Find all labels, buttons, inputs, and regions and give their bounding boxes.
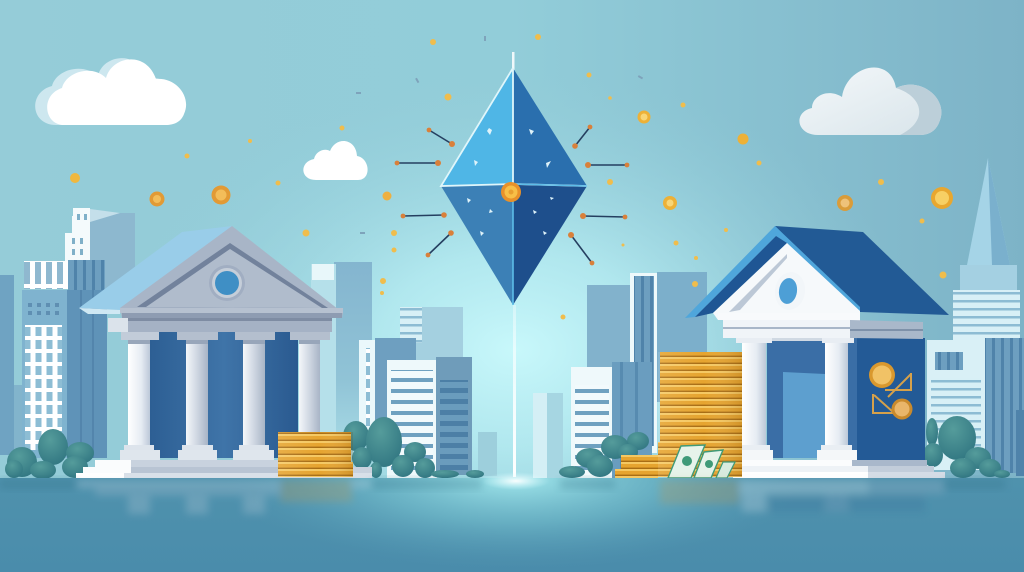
right bank: main roof (685, 226, 949, 318)
right bank: entablature (723, 320, 923, 341)
kite: upper right facet (513, 68, 587, 186)
right bank: columns (735, 338, 857, 460)
left bank: columns (120, 332, 330, 460)
right bank: steps (733, 460, 945, 478)
kite: white edges (441, 68, 587, 186)
light beam (512, 52, 516, 477)
kite: lower right facet (513, 184, 587, 305)
left bank: pediment (120, 226, 343, 318)
left bank: gold coin stack (278, 432, 353, 477)
cloud: top left (35, 58, 186, 125)
right bank: pediment (713, 243, 860, 320)
left bank: steps (76, 460, 372, 478)
right bank: coin exchange icon (869, 362, 912, 420)
kite: center coin (501, 182, 521, 202)
radiating connector lines (395, 125, 629, 265)
buildings: left skyline (0, 208, 135, 458)
right bank: small gold coin stack (615, 455, 658, 478)
water: left bank reflection (76, 480, 372, 514)
right bank (615, 226, 949, 478)
right bank: banknotes (668, 445, 735, 478)
kite: light seams (513, 184, 587, 305)
kite: small arrow marks (467, 128, 554, 236)
trees: center right (559, 432, 649, 478)
trees: far right (923, 416, 1010, 478)
kite: lower left facet (441, 184, 513, 305)
trees: far left (5, 429, 94, 479)
right bank: tall gold coin stack (658, 352, 742, 477)
right bank: door (783, 372, 825, 458)
water surface (0, 472, 1024, 572)
water: glow where beam lands (482, 472, 550, 490)
right bank: walls (767, 338, 925, 460)
cloud: top right (799, 68, 941, 135)
buildings: center right skyline (533, 272, 707, 478)
trees: center left (343, 417, 484, 478)
left bank: entablature (108, 318, 332, 332)
floating gold coins (70, 34, 953, 320)
left bank: back wall (150, 332, 298, 458)
water: right bank reflection (660, 480, 945, 512)
kite diamond token (441, 68, 587, 305)
water: dark tree reflections (0, 479, 1005, 489)
left bank: blue side roof (79, 226, 232, 310)
kite: upper left facet (441, 68, 513, 186)
buildings: center left skyline (311, 262, 497, 478)
cloud: small center left (303, 141, 368, 180)
buildings: far right skyline (927, 158, 1024, 476)
left bank (76, 226, 372, 478)
